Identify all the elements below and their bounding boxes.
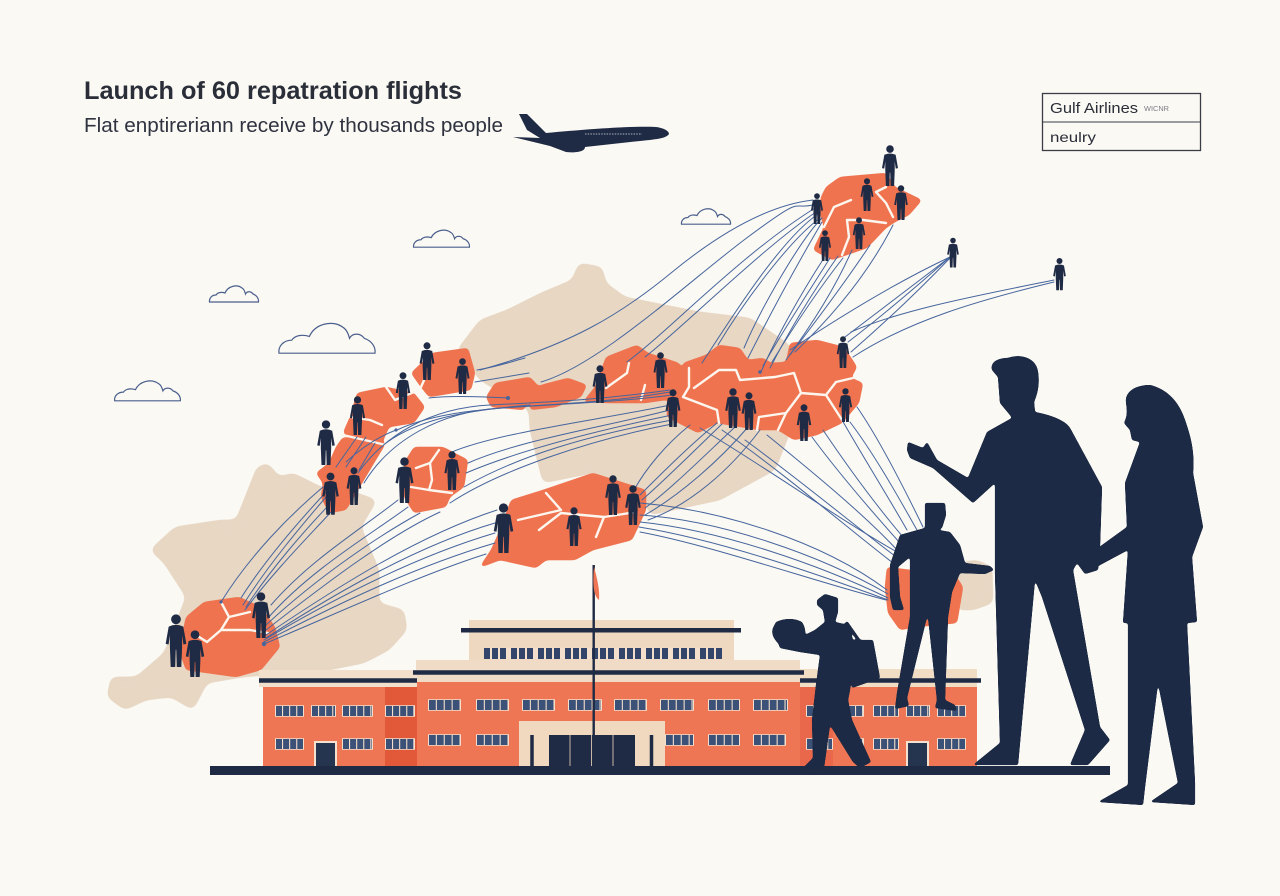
building: window frames — [275, 654, 966, 744]
legend label: second row: neulry — [1050, 129, 1096, 145]
flight arcs — [221, 200, 1054, 644]
person: far right upper — [947, 238, 959, 268]
person: far right lower — [1053, 258, 1066, 290]
person: southwest 3 — [186, 630, 204, 677]
building: centre block — [417, 682, 800, 766]
region: southwest cluster — [179, 597, 280, 677]
building: side doors — [314, 741, 929, 766]
person: south cluster 3 — [605, 475, 621, 515]
person: upper left 7 — [347, 467, 361, 505]
cloud 3 — [115, 381, 180, 401]
legend box — [1042, 94, 1200, 150]
person: pair left — [725, 388, 741, 428]
walker silhouette — [778, 594, 871, 768]
building — [259, 565, 981, 767]
building: left wing roof — [259, 670, 417, 687]
building: roof bars — [259, 672, 981, 680]
region: top cluster — [813, 173, 922, 260]
rock — [772, 619, 805, 645]
building: right wing roof — [800, 669, 977, 687]
map: orange regions — [179, 173, 963, 677]
map: tan landmasses — [107, 263, 993, 710]
title: Launch of 60 repatration flights — [84, 77, 462, 105]
region: central main block — [667, 340, 863, 440]
map: tan landmass west — [107, 463, 407, 710]
person: south cluster 4 — [625, 485, 641, 525]
standing boy on building — [890, 503, 994, 711]
person: top cluster 5 — [819, 230, 831, 261]
person: upper left 4 — [350, 396, 365, 435]
map: tan landmass east — [957, 560, 993, 610]
region: south cluster — [479, 473, 646, 568]
person: centre 5 — [653, 352, 668, 388]
building: top block — [469, 620, 734, 662]
person: south cluster 2 — [566, 507, 582, 546]
region: middle small cluster — [404, 447, 468, 513]
clouds — [115, 209, 731, 401]
person: centre east 1 — [837, 336, 849, 368]
arc end markers — [219, 370, 762, 646]
map: region borders — [196, 187, 893, 642]
person: top cluster 2 — [861, 178, 873, 211]
person: upper left 5 — [317, 420, 335, 465]
person: centre south 1 — [797, 404, 811, 441]
person: south cluster 1 — [494, 503, 513, 553]
large man silhouette — [907, 356, 1110, 765]
person: centre east 2 — [839, 388, 852, 422]
region: east cluster — [885, 567, 963, 630]
cloud 1 — [209, 286, 259, 302]
person: upper left 6 — [322, 473, 339, 515]
person: middle cluster 1 — [396, 457, 413, 503]
bag — [850, 640, 880, 688]
cloud 4 — [414, 230, 469, 247]
person: southwest 1 — [252, 592, 270, 638]
flagpole and flag — [592, 565, 599, 767]
person: upper left 3 — [396, 372, 410, 409]
person: top cluster 6 — [853, 217, 865, 249]
ground line — [210, 766, 1110, 775]
person: top cluster 4 — [811, 193, 823, 224]
person: upper left 1 — [455, 358, 470, 394]
person: centre 4 — [666, 389, 680, 427]
person: top cluster 3 — [894, 185, 908, 220]
person: pair right — [742, 392, 756, 430]
bag strap — [846, 622, 860, 642]
region: central coast pieces — [486, 345, 689, 410]
legend small tag: WICNR — [1144, 106, 1169, 113]
region: upper left cluster — [316, 348, 475, 513]
cloud 2 — [279, 323, 375, 353]
building: centre upper storey — [416, 660, 800, 682]
airplane icon — [513, 114, 669, 152]
person: top cluster 1 — [882, 145, 898, 186]
building: wing windows — [276, 711, 965, 744]
person: southwest 2 — [166, 614, 186, 667]
subtitle: Flat enptireriann receive by thousands people — [84, 115, 503, 137]
building: top windows — [484, 648, 722, 659]
map: tan landmass centre — [457, 263, 795, 515]
person: centre 6 — [593, 365, 607, 403]
person: middle cluster 2 — [444, 451, 460, 490]
large woman silhouette — [1078, 385, 1203, 805]
people on the map — [166, 145, 1066, 677]
building: left wing — [263, 687, 417, 766]
building: centre windows — [429, 705, 787, 740]
cloud 5 — [681, 209, 731, 224]
person: upper left 2 — [420, 342, 434, 380]
legend label: airline: Gulf Airlines — [1050, 100, 1138, 117]
building: right wing — [800, 687, 977, 766]
building: entrance — [519, 721, 665, 766]
walking person with bag and rock — [772, 594, 880, 768]
